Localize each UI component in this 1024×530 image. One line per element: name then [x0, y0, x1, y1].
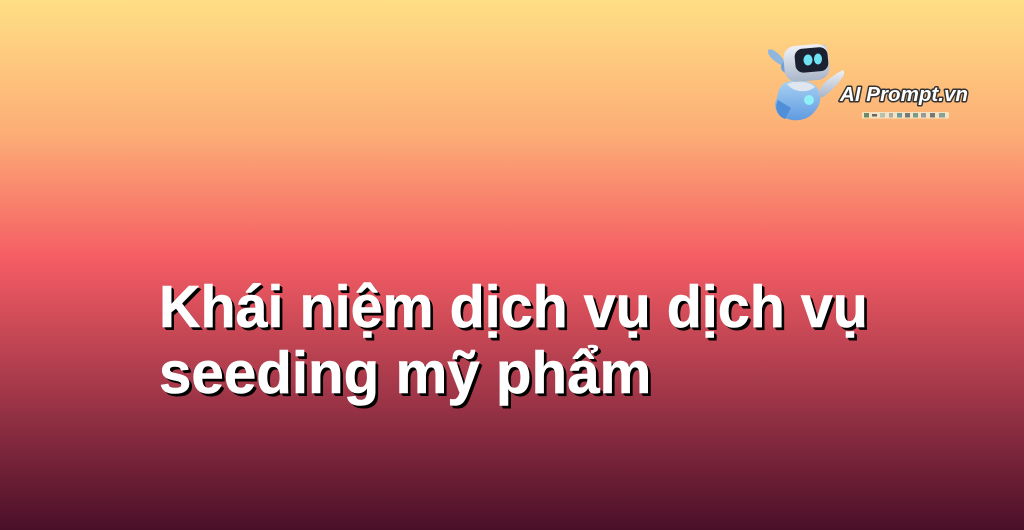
robot face: [794, 47, 829, 73]
title line 2: seeding mỹ phẩm: [159, 340, 651, 406]
logo wordmark: AI Prompt.vn: [839, 83, 968, 106]
robot head: [783, 43, 830, 83]
robot arm: [818, 70, 844, 97]
icon: robot mascot: [768, 43, 844, 120]
logo tagline icons: [862, 112, 949, 118]
robot body: [775, 80, 820, 120]
logo: AI Prompt.vn: [768, 44, 969, 120]
title: [159, 274, 868, 408]
title line 1: Khái niệm dịch vụ dịch vụ: [159, 274, 868, 340]
